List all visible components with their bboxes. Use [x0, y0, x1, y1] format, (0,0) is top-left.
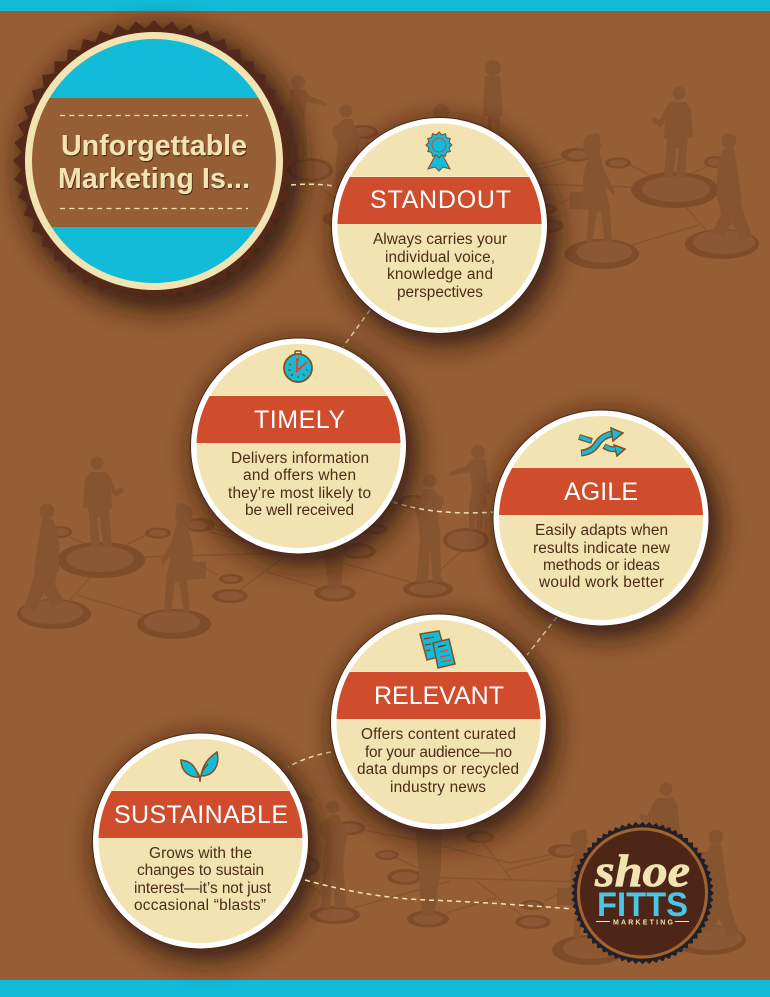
description: timely: be well received	[245, 502, 354, 519]
title text: Marketing Is...	[58, 163, 250, 195]
heading: relevant: RELEVANT	[374, 682, 504, 710]
icon: stopwatch	[284, 351, 312, 382]
icon: ribbon	[426, 132, 452, 171]
description: agile: would work better	[538, 574, 664, 591]
description: timely: and offers when	[243, 467, 356, 484]
connector: sustainable to logo	[305, 880, 573, 909]
heading: agile: AGILE	[564, 478, 638, 506]
description: sustainable	[134, 845, 272, 914]
description: standout	[373, 231, 507, 301]
description: timely	[228, 450, 371, 519]
description: sustainable: occasional “blasts”	[134, 897, 266, 914]
bottom bar	[0, 980, 770, 997]
heading: sustainable: SUSTAINABLE	[114, 801, 288, 829]
description: standout: knowledge and	[387, 266, 493, 283]
title text	[58, 130, 250, 195]
top bar	[0, 0, 770, 11]
connector: relevant to sustainable	[288, 752, 331, 767]
card: sustainable	[92, 732, 318, 961]
card: agile	[492, 410, 719, 638]
logo	[571, 822, 714, 964]
description: agile: Easily adapts when	[535, 522, 668, 539]
description: relevant: for your audience—no	[365, 744, 512, 761]
people network: left	[17, 430, 490, 639]
heading: timely: TIMELY	[254, 406, 345, 434]
icon: documents	[420, 631, 455, 668]
description: sustainable: changes to sustain	[137, 862, 264, 879]
logo text: fitts: FITTS	[597, 886, 688, 924]
logo text: marketing: MARKETING	[613, 920, 674, 926]
description: sustainable: interest—it’s not just	[134, 880, 272, 897]
card: standout	[331, 117, 558, 346]
connector: timely to agile	[393, 502, 495, 513]
description: timely: Delivers information	[231, 450, 369, 467]
card: timely	[190, 338, 416, 566]
logo rules	[596, 920, 689, 922]
description: relevant	[357, 726, 519, 796]
description: timely: they’re most likely to	[228, 485, 371, 502]
logo text: shoe: shoe	[594, 845, 690, 896]
description: relevant: data dumps or recycled	[357, 761, 519, 778]
description: standout: perspectives	[397, 284, 483, 301]
icon: crossing arrows	[579, 428, 625, 456]
connector: agile to relevant	[527, 617, 557, 655]
description: relevant: Offers content curated	[361, 726, 516, 743]
icon: sprout	[181, 752, 218, 782]
people network: top right	[286, 60, 759, 269]
description: standout: individual voice,	[385, 249, 495, 266]
description: standout: Always carries your	[373, 231, 507, 248]
description: agile	[533, 522, 671, 591]
description: relevant: industry news	[390, 779, 486, 796]
heading: standout: STANDOUT	[370, 186, 511, 214]
title badge	[13, 20, 303, 311]
description: agile: methods or ideas	[543, 557, 660, 574]
connector: standout to timely	[343, 310, 370, 347]
people network: bottom right	[273, 756, 746, 965]
description: agile: results indicate new	[533, 540, 671, 557]
title text: Unforgettable	[61, 130, 247, 162]
connector: badge to standout	[291, 184, 334, 186]
description: sustainable: Grows with the	[149, 845, 252, 862]
card: relevant	[330, 614, 556, 842]
